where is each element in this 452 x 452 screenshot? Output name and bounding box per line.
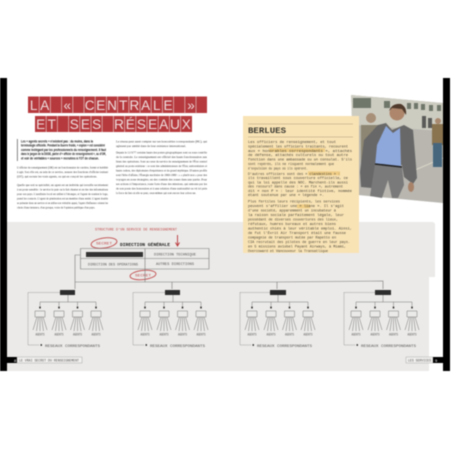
- footer: right folio: [406, 357, 443, 363]
- left black edge: [0, 78, 7, 371]
- sidebar text: des recours? dans cause : « en fin », autrement: [248, 185, 343, 190]
- sidebar text: D'autres officiers sont des « clandestins » :: [248, 172, 340, 177]
- text block: left column paragraphs: pour son pays. L'auxiliaire local est utilisé à l'étranger, et l'agent de soutien le loge,: [17, 192, 108, 197]
- text block: left column paragraphs: L'officier de renseignement (OR) est un fonctionnaire de carrière, formé et habilité: [17, 166, 108, 170]
- title line 1 tiles: L: [153, 98, 161, 113]
- text block: right column paragraphs: Le réseau peut aussi compter sur ses honorables correspondants (HC), qui: [116, 140, 207, 144]
- text block: right column paragraphs: lieux des opérations. Sont au cœur du service de renseignement de l'État central: [116, 158, 207, 164]
- network tree 4: AGENTS: [352, 332, 361, 336]
- title: La « centrale » et ses réseaux: [28, 96, 207, 132]
- sidebar text: d'expulsion du pays où ils opèrent.: [248, 166, 308, 171]
- title line 2 tiles: T: [48, 117, 56, 132]
- network tree 3: AGENTS: [248, 332, 257, 336]
- sidebar text: en 5 missions aviobel Payant Airways, à Miami,: [248, 244, 346, 250]
- network tree 3: AGENTS: [266, 332, 276, 336]
- title line 1 tiles: N: [107, 98, 117, 113]
- panel: grey paper sheet behind organisation chart: [7, 222, 435, 371]
- sidebar text: de défense, attachés culturels ou tout autre: [248, 153, 348, 158]
- text block: left column paragraphs: choix d'une instance, d'un groupe, voire de l'opinion publique d'un pays.: [17, 206, 95, 210]
- title line 1 tiles: [28, 96, 207, 114]
- network tree 2: [133, 290, 208, 348]
- sidebar text: sont repérés, ils ne risquent normalement que: [248, 162, 334, 167]
- text block: left column paragraphs: à un poste sensible : le service le paie ou le fait chanter et en tire des informations: [17, 188, 109, 192]
- network tree 3: [240, 290, 315, 348]
- network tree 2: AGENTS: [196, 332, 206, 336]
- text block: left column paragraphs: Quelle que soit sa spécialité, un agent est un individu qui travaille secrètement: [17, 183, 108, 188]
- sidebar text: Overcoward et Vancouveur la Transatlique: [248, 249, 328, 254]
- text block: right column paragraphs: Depuis le 11/3/77 certains hauts des postes géographiques sont ou sous contrôle: [116, 150, 207, 154]
- text block: introduction in bold: comme inélégant par les professionnels du renseignement. Il faut: [21, 148, 107, 152]
- right black edge: [443, 78, 450, 371]
- sidebar text: qui la loi appelle des NOC. Marchent-ils aussi: [248, 180, 348, 185]
- text block: right column paragraphs: [116, 140, 208, 196]
- text block: left column paragraphs: [17, 166, 109, 210]
- sidebar text: [248, 140, 352, 254]
- title line 1 tiles: E: [163, 98, 173, 113]
- title line 2 tiles: A: [159, 117, 168, 132]
- red circled note left: SECRET: [96, 242, 112, 246]
- photo: main man: [360, 104, 417, 198]
- title line 2 tiles: É: [126, 117, 135, 132]
- sidebar text: dit « non P » : leur identité fictive, nommée: [248, 189, 352, 194]
- title line 2 tiles: S: [92, 117, 101, 132]
- chart: organisation of an intelligence service: [28, 228, 419, 348]
- title line 1 tiles: C: [85, 98, 95, 113]
- title line 1 tiles: »: [187, 98, 195, 113]
- title line 2 tiles: E: [36, 117, 45, 132]
- sidebar text: d'une société, apparemment un incubateur à: [248, 208, 337, 214]
- title line 2 tiles: S: [137, 117, 146, 132]
- sidebar text: Les officiers de renseignement, et tout: [248, 140, 336, 145]
- network tree 1: AGENTS: [73, 332, 82, 336]
- sidebar text: la raison sociale parfaitement légale, leur: [248, 213, 344, 218]
- network tree 4: AGENTS: [389, 332, 398, 336]
- directions table: [80, 248, 209, 269]
- network tree 3: AGENTS: [304, 332, 313, 336]
- text block: right column paragraphs: de son poste des honoraires et à une relation d'une nationalité ou vit ici près: [116, 186, 208, 190]
- photo background: building: [351, 95, 443, 131]
- text block: left column paragraphs: se présente dans un service et en utilise son véritable appui, l'agent d'influence oriente les: [17, 201, 108, 206]
- title line 2 tiles: [35, 116, 192, 132]
- text block: left column paragraphs: à agir. Son rôle est, au sein de ce service, assurer des fonctions d'officier traitant: [17, 170, 108, 175]
- title line 2 tiles: X: [182, 117, 191, 132]
- network tree 1: AGENTS: [92, 332, 101, 336]
- directions table: AUTRES DIRECTIONS: [156, 262, 194, 266]
- red circled note below table: SECRET: [135, 274, 151, 278]
- text block: right column paragraphs: de la centrale. Le renseignement est officiel des hauts fonctionnaires aux: [116, 155, 207, 159]
- text block: right column paragraphs: hauts cadres, des diplomates d'expérience et de grand mythique. D'autres profils: [116, 168, 208, 174]
- network tree 4: [344, 290, 419, 348]
- directions table: DIRECTION TECHNIQUE: [154, 252, 196, 256]
- text block: left column paragraphs: prend les contacts. L'agent de pénétration est un membre d'une entité. L'agent double: [17, 196, 108, 200]
- title line 1 tiles: A: [40, 98, 49, 113]
- network tree 1: [28, 290, 103, 348]
- network tree 1: RÉSEAUX CORRESPONDANTS: [45, 344, 100, 348]
- network tree 4: AGENTS: [370, 332, 380, 336]
- text block: right column paragraphs: voyages en zone étrangère, en des comités des zones dans une partie. Pour: [116, 178, 208, 182]
- network tree 2: AGENTS: [160, 332, 169, 336]
- network tree 2: AGENTS: [140, 332, 150, 336]
- sidebar text: spécialement les officiers traitants, recourent: [248, 144, 348, 149]
- sidebar text: de fut l'Évrit Air Transport était une fausse: [248, 231, 346, 236]
- sidebar text: peuvent s'affilier une « liane ». Il s'agit: [248, 204, 344, 209]
- text block: introduction in bold: [17, 139, 107, 161]
- title line 1 tiles: «: [63, 98, 71, 113]
- red annotation arrow: [176, 235, 180, 246]
- sidebar heading: BERLUES: [248, 127, 286, 136]
- title line 2 tiles: R: [114, 117, 124, 132]
- photo: pedestrians in background: [422, 116, 432, 128]
- title line 1 tiles: L: [30, 98, 38, 113]
- text block: introduction in bold: terminologie officielle. Pendant la Guerre froide, « espion » est considéré: [21, 144, 105, 148]
- title line 2 tiles: E: [81, 117, 90, 132]
- network tree 3: RÉSEAUX CORRESPONDANTS: [257, 344, 312, 348]
- photo: pedestrian right: [432, 118, 443, 167]
- text block: introduction in bold: et voir de véritables « sources » recrutées à l'OT de chacun.: [21, 156, 99, 160]
- network tree 2: AGENTS: [178, 332, 187, 336]
- highlighted terms: [269, 148, 340, 208]
- network tree 4: RÉSEAUX CORRESPONDANTS: [361, 344, 416, 348]
- title line 2 tiles: S: [70, 117, 79, 132]
- footer: right folio: 9: [435, 358, 438, 363]
- photo: pedestrian left: [361, 113, 378, 170]
- title line 1 tiles: R: [130, 98, 140, 113]
- directions table: DIRECTION DES OPÉRATIONS: [88, 262, 138, 266]
- network tree 1: AGENTS: [36, 332, 45, 336]
- title line 2 tiles: U: [170, 117, 180, 132]
- text block: introduction in bold: Les « agents secrets » n'existent pas : du moins, dans la: [21, 140, 93, 144]
- title line 2 tiles: E: [148, 117, 157, 132]
- sidebar text: étant soutenue par une « légende ».: [248, 193, 324, 198]
- title line 1 tiles: A: [141, 98, 150, 113]
- sidebar text: CIA recrutait des pilotes de guerre en leur pays.: [248, 240, 350, 245]
- text block: right column paragraphs: général au poste extérieur : ce sont des administrateurs de l'État, universitaires et: [116, 163, 207, 169]
- text block: right column paragraphs: agissent par amitié dans de leur existence international.: [116, 144, 186, 148]
- sidebar text: fonction dans une ambassade ou un consulat. S'ils: [248, 158, 352, 163]
- red circled note left: [90, 236, 118, 250]
- text block: right column paragraphs: sont l'hôte d'affaire, l'Énergie nucléaire de 1960-1980 : « « plutôt non » pour des: [116, 172, 208, 178]
- network tree 4: AGENTS: [408, 332, 417, 336]
- text block: right column paragraphs: la force du lien où elle se peut, ceux-mêmes qui sont encore leur action sur.: [116, 191, 196, 196]
- sidebar text: réfutaux, humres bureaux et autres biens: [248, 222, 336, 227]
- title line 1 tiles: T: [119, 98, 127, 113]
- photo: road marking: [415, 158, 443, 170]
- chart caption in red: STRUCTURE D'UN SERVICE DE RENSEIGNEMENT: [95, 228, 178, 232]
- red circled note below table: [130, 269, 156, 281]
- sidebar text: authentic chiés à leur véritable emploi. Ainsi,: [248, 226, 352, 232]
- title line 1 tiles: E: [96, 98, 105, 113]
- sidebar text: ils travaillent sous couverture officielle, ce: [248, 176, 348, 181]
- text block: left column paragraphs: (OT), qui recrute les vrais agents, ou qui en conçoit les opérations.: [17, 174, 97, 180]
- sidebar text: Plus fertiles leurs récipients, les services: [248, 200, 340, 204]
- sidebar text: possédant de diverses couvertures des lieux,: [248, 218, 338, 222]
- direction générale heading: DIRECTION GÉNÉRALE: [120, 243, 170, 248]
- footer: left folio: 8: [14, 358, 17, 363]
- panel: page background: [7, 78, 443, 371]
- sidebar text: compagnie de transport mutée par Rapetto en: [248, 236, 336, 240]
- network tree 3: AGENTS: [285, 332, 294, 336]
- sidebar text: aux « honorables correspondants », attachés: [248, 149, 352, 154]
- connector lines from table to networks: [75, 255, 383, 289]
- network tree 1: AGENTS: [54, 332, 64, 336]
- text block: right column paragraphs: ses actions à l'importance, toute forte d'une des missions, qui remonte par les: [116, 182, 208, 187]
- text block: introduction in bold: dans le jargon de la DGSE, parler d'« officier de renseignement », ou d'OR,: [21, 152, 106, 156]
- panel: yellow sidebar Berlues: [243, 116, 359, 254]
- photo: man in grey suit walking in a street: [351, 95, 443, 203]
- network tree 2: RÉSEAUX CORRESPONDANTS: [150, 344, 205, 348]
- footer: right folio: LES SERVICES: [408, 358, 431, 362]
- footer: left folio: [7, 357, 82, 363]
- footer: left folio: LE VRAI SECRET DU RENSEIGNEMENT: [19, 358, 79, 362]
